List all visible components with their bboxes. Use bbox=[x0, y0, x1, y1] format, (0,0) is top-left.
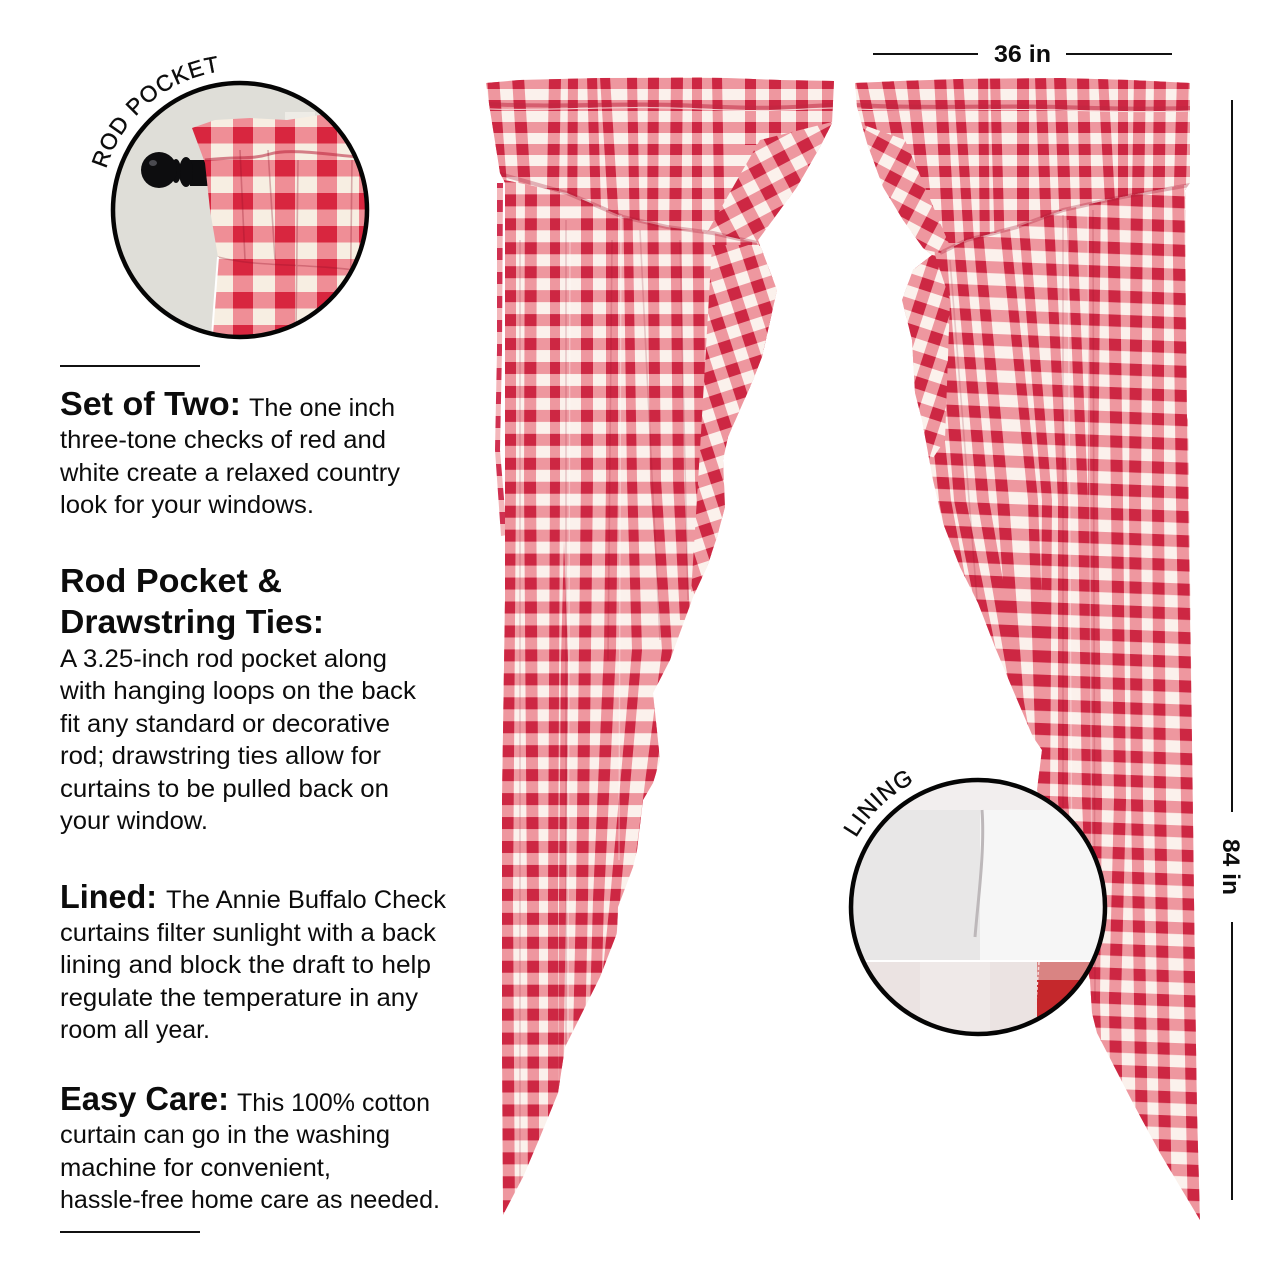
lining photo bbox=[853, 782, 1103, 1032]
lining circle outline bbox=[851, 780, 1105, 1034]
text block: easy care: Easy Care: bbox=[60, 1080, 229, 1117]
text block: easy care: curtain can go in the washing bbox=[60, 1121, 390, 1149]
text block: easy care: hassle-free home care as needed. bbox=[60, 1186, 440, 1214]
text block: lined: The Annie Buffalo Check bbox=[166, 886, 446, 914]
text block: rod pocket and drawstring ties bbox=[59, 562, 417, 835]
left curtain panel bbox=[480, 70, 840, 1230]
text block: lined: room all year. bbox=[60, 1016, 210, 1044]
rod pocket curved label: ROD POCKET bbox=[92, 56, 217, 168]
text block: lined bbox=[60, 878, 446, 1044]
text block: rod pocket and drawstring ties: A 3.25-inch rod pocket along bbox=[60, 645, 387, 673]
text block: set of two: The one inch bbox=[249, 394, 395, 422]
text block: set of two: look for your windows. bbox=[60, 491, 314, 519]
drawstring tie strip bbox=[495, 183, 507, 536]
top divider bbox=[60, 365, 200, 367]
text block: easy care: machine for convenient, bbox=[60, 1154, 331, 1182]
text block: lined: curtains filter sunlight with a back bbox=[60, 919, 437, 947]
height dimension: 84 in: 84 in bbox=[1217, 839, 1244, 895]
text block: set of two: three-tone checks of red and bbox=[60, 426, 386, 454]
text block: rod pocket and drawstring ties: Rod Pocket & bbox=[60, 562, 282, 599]
text block: rod pocket and drawstring ties: rod; drawstring ties allow for bbox=[60, 742, 381, 770]
icon: black rod finial bbox=[141, 152, 210, 188]
text block: lined: regulate the temperature in any bbox=[60, 984, 419, 1012]
right curtain panel bbox=[850, 70, 1210, 1230]
width dimension: 36 in: 36 in bbox=[994, 41, 1051, 68]
text block: lined: lining and block the draft to help bbox=[60, 951, 431, 979]
text block: rod pocket and drawstring ties: with hanging loops on the back bbox=[59, 677, 417, 705]
text block: rod pocket and drawstring ties: fit any standard or decorative bbox=[60, 710, 390, 738]
lining detail circle bbox=[843, 771, 1108, 1036]
text block: rod pocket and drawstring ties: curtains to be pulled back on bbox=[60, 775, 389, 803]
rod pocket circle outline bbox=[113, 83, 367, 337]
text block: set of two: Set of Two: bbox=[60, 385, 241, 422]
text block: set of two bbox=[59, 385, 401, 519]
text block: rod pocket and drawstring ties: your window. bbox=[60, 807, 208, 835]
circle photo bbox=[110, 80, 370, 340]
text block: rod pocket and drawstring ties: Drawstring Ties: bbox=[60, 603, 324, 640]
rod pocket curtain fabric bbox=[192, 115, 370, 340]
text block: lined: Lined: bbox=[60, 878, 157, 915]
text block: set of two: white create a relaxed country bbox=[59, 459, 401, 487]
text block: easy care bbox=[60, 1080, 440, 1214]
lining curved label: LINING bbox=[843, 771, 912, 837]
text block: easy care: This 100% cotton bbox=[237, 1089, 430, 1117]
left curtain gingham fabric bbox=[480, 70, 840, 1230]
bottom divider bbox=[60, 1231, 200, 1233]
rod pocket detail circle bbox=[92, 56, 370, 340]
